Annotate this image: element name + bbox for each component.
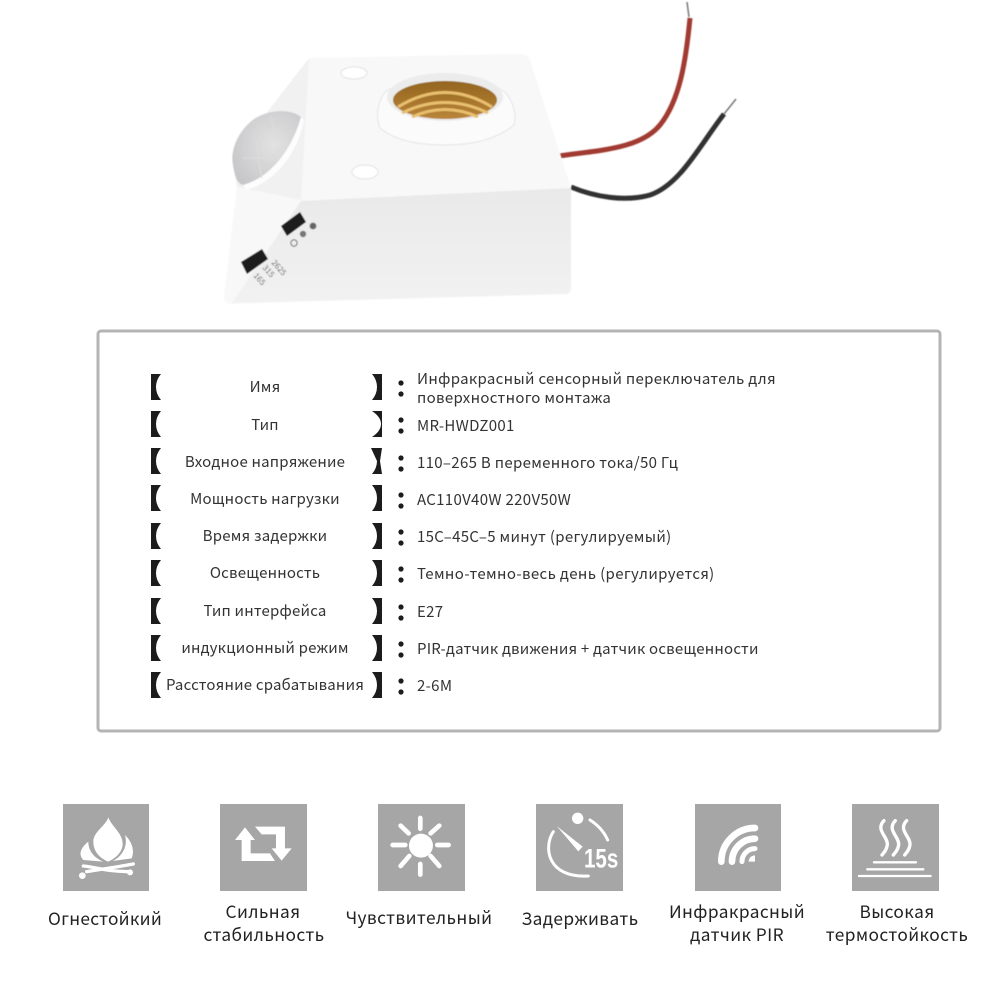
row: load power [151, 485, 571, 511]
label: Инфракрасный [669, 898, 805, 923]
row: illuminance [151, 560, 715, 586]
housing [224, 54, 571, 304]
label: термостойкость [826, 921, 968, 946]
row: delay time [151, 523, 672, 549]
row: input voltage: Входное напряжение [185, 451, 345, 472]
sliders and markings: 165 [251, 271, 268, 288]
feature: strong stability [203, 804, 325, 946]
row: trigger distance: Расстояние срабатывания [166, 674, 364, 695]
label: Высокая [859, 898, 935, 923]
sliders and markings: 315 [260, 263, 277, 280]
row: delay time: Время задержки [203, 525, 327, 546]
mounting holes [341, 67, 378, 179]
sliders and markings [241, 212, 316, 288]
specification panel [98, 331, 940, 731]
row: load power: AC110V40W 220V50W [417, 489, 571, 510]
icon: 15s timer: 15s [584, 843, 618, 873]
row: induction mode: индукционный режим [181, 637, 349, 658]
red wire [559, 2, 690, 156]
icon: heat waves over plate [859, 821, 931, 876]
row: input voltage: 110–265 В переменного тока/50 Гц [417, 452, 678, 473]
feature: high heat resistance [826, 804, 968, 946]
feature: delay [521, 804, 639, 930]
row: name [151, 368, 776, 408]
lamp socket [377, 73, 515, 145]
row: interface type: E27 [417, 601, 443, 622]
black wire [571, 99, 736, 198]
PIR dome lens [232, 111, 304, 190]
label [826, 898, 968, 946]
row: induction mode [151, 635, 759, 661]
label [203, 898, 325, 946]
row: name: Инфракрасный сенсорный переключатель для [417, 368, 776, 389]
feature: infrared PIR sensor [669, 804, 805, 946]
label: датчик PIR [690, 921, 784, 946]
row: interface type [151, 598, 443, 624]
row: name: поверхностного монтажа [417, 387, 611, 408]
feature: sensitive [346, 804, 492, 929]
row: type: Тип [251, 414, 279, 435]
label: Сильная [226, 898, 300, 923]
row: trigger distance [151, 672, 452, 698]
label [669, 898, 805, 946]
row: type [151, 411, 515, 437]
label: Задерживать [521, 905, 639, 930]
label: Огнестойкий [48, 905, 162, 930]
label: стабильность [203, 921, 325, 946]
row: interface type: Тип интерфейса [203, 600, 327, 621]
icon: repeat arrows [235, 827, 292, 861]
row: illuminance: Темно-темно-весь день (регулируется) [417, 563, 715, 584]
row: induction mode: PIR-датчик движения + датчик освещенности [417, 638, 759, 659]
row: type: MR-HWDZ001 [417, 415, 515, 436]
row: delay time: 15С–45С–5 минут (регулируемый) [417, 526, 672, 547]
product photo: PIR sensor lamp socket [224, 2, 736, 304]
sliders and markings: 2625 [269, 258, 289, 278]
row: illuminance: Освещенность [210, 562, 320, 583]
icon: flame [79, 817, 133, 879]
feature: fire resistant [48, 804, 162, 930]
label: Чувствительный [346, 904, 492, 929]
icon: sun [393, 818, 449, 875]
row: name: Имя [250, 376, 280, 397]
row: input voltage [151, 448, 678, 474]
icon: signal arcs [721, 828, 755, 862]
row: load power: Мощность нагрузки [190, 488, 340, 509]
row: trigger distance: 2-6M [417, 675, 452, 696]
